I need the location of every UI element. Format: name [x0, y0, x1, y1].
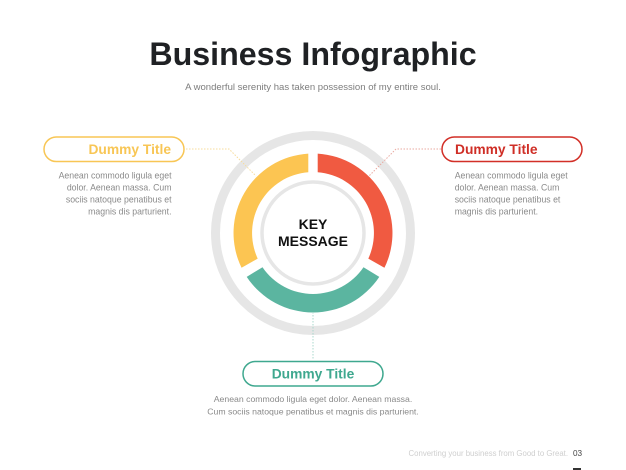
connector: red: [369, 149, 441, 176]
text block: yellow: sociis natoque penatibus et: [66, 194, 172, 204]
center key message: KEY: [299, 216, 328, 232]
segment: teal: [247, 267, 379, 312]
callout: yellow: [44, 137, 184, 216]
callout: teal: [207, 362, 419, 416]
text block: red: Aenean commodo ligula eget: [455, 170, 568, 180]
heading: red: Dummy Title: [455, 142, 538, 157]
text block: teal: Aenean commodo ligula eget dolor. Aenean massa.: [214, 394, 412, 404]
text block: yellow: Aenean commodo ligula eget: [59, 170, 172, 180]
text block: yellow: [59, 170, 172, 216]
text block: red: magnis dis parturient.: [455, 206, 538, 216]
pill: red: [442, 137, 582, 162]
pill: teal: [243, 362, 383, 386]
text block: red: sociis natoque penatibus et: [455, 194, 561, 204]
subtitle: A wonderful serenity has taken possession of my entire soul.: [185, 82, 441, 93]
center key message: [278, 216, 348, 249]
callout: red: [442, 137, 582, 216]
text block: red: [455, 170, 568, 216]
segment: yellow: [234, 154, 308, 268]
segment: red: [318, 154, 392, 268]
pill: yellow: [44, 137, 184, 162]
page number: 03: [573, 449, 583, 458]
heading: teal: Dummy Title: [272, 366, 355, 382]
footer text: Converting your business from Good to Great.: [409, 449, 568, 458]
center key message: MESSAGE: [278, 233, 348, 249]
heading: yellow: Dummy Title: [88, 142, 171, 157]
connector: teal: [312, 312, 314, 360]
text block: teal: [207, 394, 419, 416]
text block: yellow: magnis dis parturient.: [88, 206, 172, 216]
footer mark: [573, 468, 581, 470]
text block: yellow: dolor. Aenean massa. Cum: [67, 182, 172, 192]
inner grey ring: [262, 182, 364, 284]
text block: teal: Cum sociis natoque penatibus et magnis dis parturient.: [207, 406, 419, 416]
text block: red: dolor. Aenean massa. Cum: [455, 182, 559, 192]
title: Business Infographic: [149, 36, 477, 72]
outer grey ring: [216, 136, 410, 330]
connector: yellow: [186, 149, 256, 176]
